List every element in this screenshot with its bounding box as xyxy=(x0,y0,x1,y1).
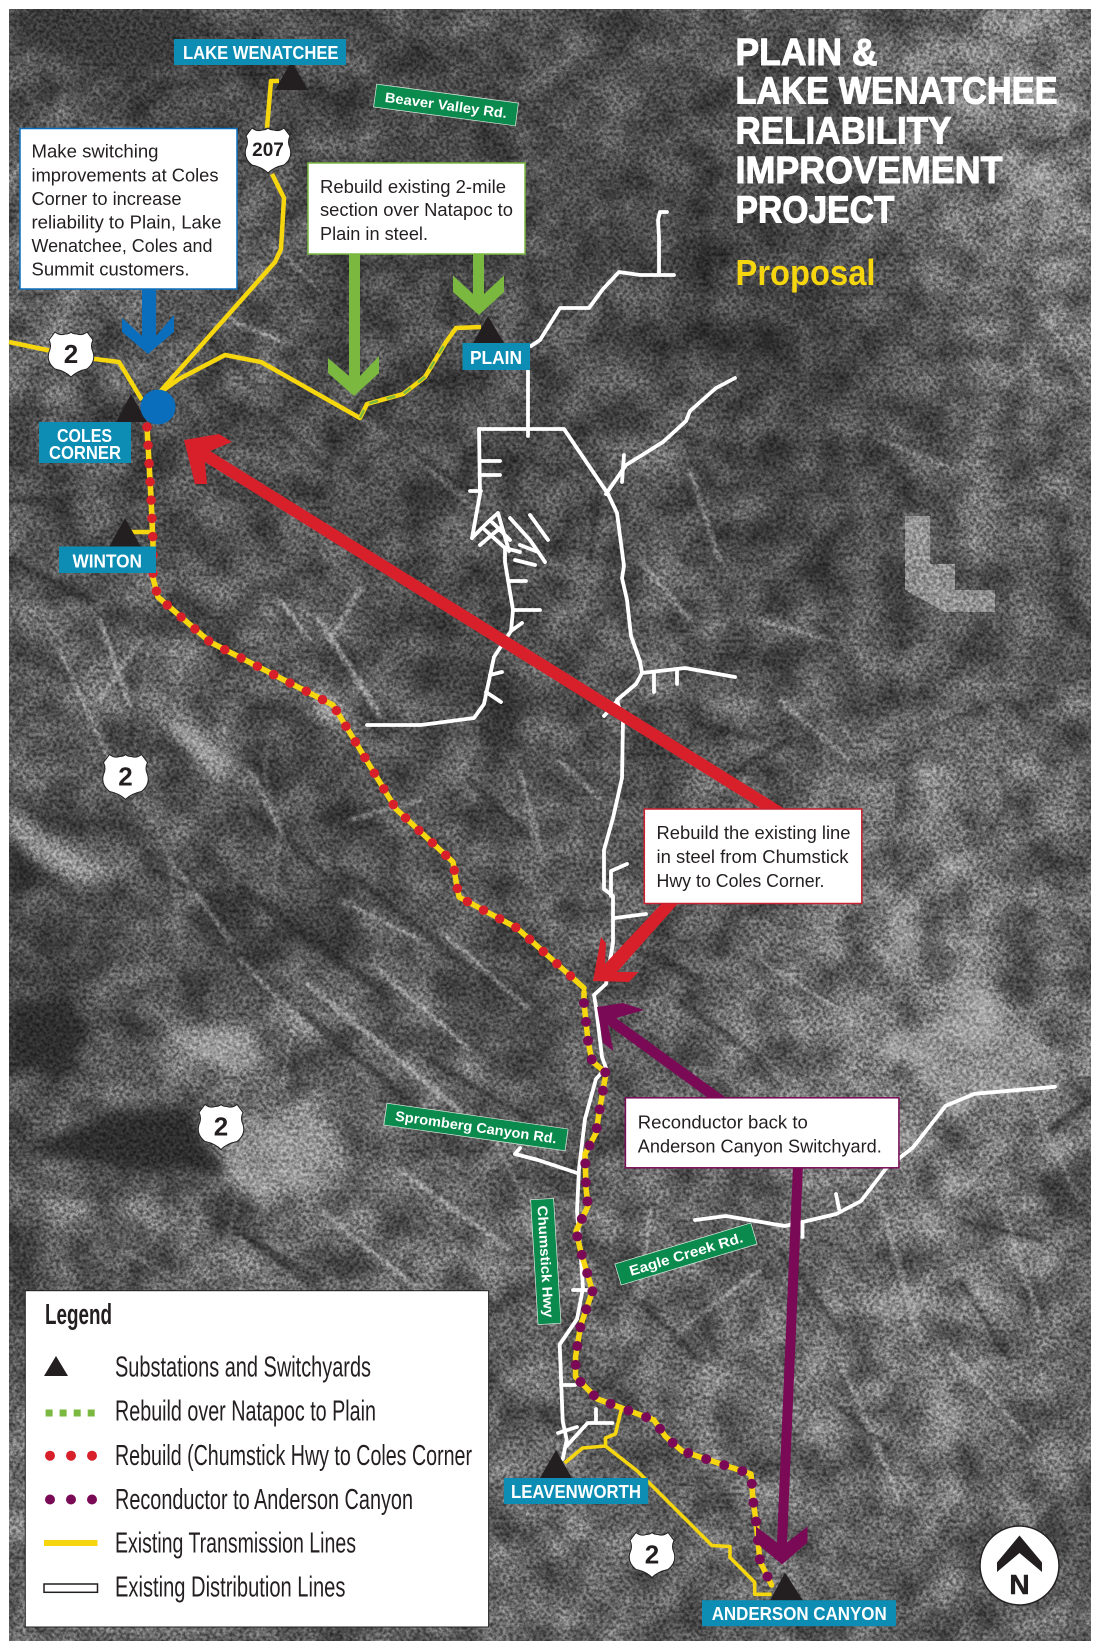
legend heading: Legend xyxy=(45,1299,112,1331)
legend: rebuild Chumstick: Rebuild (Chumstick Hwy to Coles Corner xyxy=(115,1440,472,1472)
road label: Chumstick Hwy xyxy=(531,1198,561,1325)
callout: Coles Corner switching: reliability to Plain, Lake xyxy=(32,212,222,232)
title: PLAIN & xyxy=(736,32,878,74)
callout: Coles Corner switching: improvements at Coles xyxy=(32,165,219,185)
highway shield 207 xyxy=(245,128,291,173)
arrow: red to Coles Corner xyxy=(184,434,788,811)
highway shield 207: 207 xyxy=(252,140,284,161)
highway shield 2 south xyxy=(629,1532,675,1578)
callout: rebuild in steel: Hwy to Coles Corner. xyxy=(656,871,824,891)
label: Plain: PLAIN xyxy=(470,348,522,368)
callout: reconductor: Anderson Canyon Switchyard. xyxy=(638,1136,882,1156)
callout: reconductor xyxy=(625,1098,899,1168)
label: Anderson Canyon: ANDERSON CANYON xyxy=(712,1604,887,1624)
callout: Natapoc rebuild: Rebuild existing 2-mile xyxy=(320,177,506,197)
label: Winton xyxy=(59,546,156,573)
highway shield 2 south: 2 xyxy=(645,1540,659,1570)
label: Plain xyxy=(462,343,530,370)
arrow: red to Chumstick Hwy xyxy=(593,900,681,982)
callout: reconductor: Reconductor back to xyxy=(638,1112,808,1132)
legend: rebuild Chumstick xyxy=(45,1440,472,1472)
label: Winton: WINTON xyxy=(72,552,142,572)
label: Coles Corner: CORNER xyxy=(49,443,121,463)
title: PROJECT xyxy=(736,190,894,232)
legend: reconductor xyxy=(45,1484,413,1516)
legend: distribution: Existing Distribution Lines xyxy=(115,1572,345,1604)
title: LAKE WENATCHEE xyxy=(736,70,1058,112)
callout: rebuild in steel: Rebuild the existing line xyxy=(656,823,850,843)
callout: Coles Corner switching xyxy=(20,128,237,289)
legend: transmission: Existing Transmission Lines xyxy=(115,1528,356,1560)
coles corner switching point xyxy=(140,390,176,424)
existing transmission lines xyxy=(9,81,772,1594)
highway shield 2 central: 2 xyxy=(214,1112,228,1142)
highway shield 2 west xyxy=(103,754,148,800)
road label: Spromberg Canyon Rd. xyxy=(384,1103,568,1151)
highway shield 2 central xyxy=(198,1104,244,1150)
rebuild over Natapoc to Plain route xyxy=(360,342,446,418)
legend: rebuild Natapoc xyxy=(46,1396,376,1428)
road label: Eagle Creek Rd.: Eagle Creek Rd. xyxy=(627,1229,745,1279)
road label: Beaver Valley Rd.: Beaver Valley Rd. xyxy=(384,89,508,121)
legend: transmission xyxy=(44,1528,356,1560)
callout: Coles Corner switching: Make switching xyxy=(32,142,158,162)
title: RELIABILITY xyxy=(736,110,952,152)
arrow: green to Plain xyxy=(453,250,504,315)
legend panel xyxy=(25,1291,489,1627)
substation triangles xyxy=(109,61,803,1600)
callout: Coles Corner switching: Wenatchee, Coles and xyxy=(32,236,212,256)
callout: rebuild in steel xyxy=(644,809,862,904)
highway shield 2 north xyxy=(48,332,94,377)
road label: Beaver Valley Rd. xyxy=(374,84,518,126)
callout: Natapoc rebuild: section over Natapoc to xyxy=(320,200,513,220)
subtitle: Proposal: Proposal xyxy=(736,252,876,293)
legend: rebuild Natapoc: Rebuild over Natapoc to Plain xyxy=(115,1396,376,1428)
callout: Coles Corner switching: Corner to increase xyxy=(32,189,182,209)
title: IMPROVEMENT xyxy=(736,150,1002,192)
label: Lake Wenatchee: LAKE WENATCHEE xyxy=(183,43,338,63)
callout: rebuild in steel: in steel from Chumstick xyxy=(656,847,850,867)
legend: reconductor: Reconductor to Anderson Canyon xyxy=(115,1484,413,1516)
north arrow xyxy=(980,1526,1059,1605)
road label: Eagle Creek Rd. xyxy=(615,1223,757,1285)
legend: substations xyxy=(44,1352,371,1384)
reconductor to Anderson Canyon route xyxy=(576,992,772,1585)
road label: Chumstick Hwy: Chumstick Hwy xyxy=(534,1205,557,1318)
highway shield 2 north: 2 xyxy=(64,339,78,369)
arrow: purple to Chumstick Hwy xyxy=(597,1003,729,1100)
highway shield 2 west: 2 xyxy=(118,762,133,792)
callout: Natapoc rebuild xyxy=(308,163,525,254)
arrow: green to Natapoc xyxy=(328,250,379,396)
label: Coles Corner: COLES xyxy=(57,426,112,446)
title xyxy=(736,32,1058,232)
label: Coles Corner xyxy=(39,422,131,463)
label: Leavenworth: LEAVENWORTH xyxy=(511,1482,641,1502)
legend: distribution xyxy=(44,1572,345,1604)
arrow: blue to Coles Corner xyxy=(122,285,174,354)
arrow: purple to Anderson Canyon xyxy=(756,1165,808,1564)
road label: Spromberg Canyon Rd.: Spromberg Canyon Rd. xyxy=(394,1108,558,1146)
north arrow: N xyxy=(1009,1569,1030,1600)
existing distribution lines xyxy=(367,212,1055,1459)
callout: Natapoc rebuild: Plain in steel. xyxy=(320,224,428,244)
rebuild Chumstick Hwy to Coles Corner route xyxy=(147,427,584,988)
legend: substations: Substations and Switchyards xyxy=(115,1352,371,1384)
callout: Coles Corner switching: Summit customers. xyxy=(32,260,190,280)
